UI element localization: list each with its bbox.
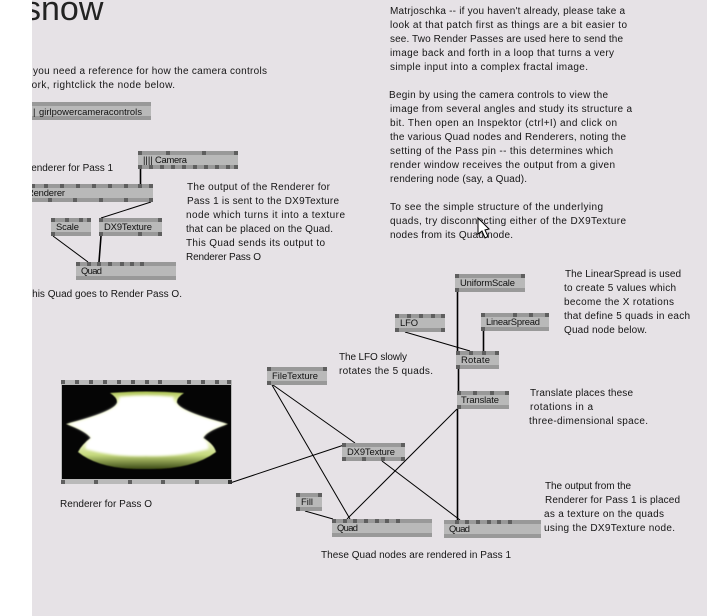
caption: quad goes to render pass 0: This Quad goes to Render Pass O.: [26, 289, 182, 300]
text block: lfo explanation: [339, 352, 433, 377]
text block: introduction: Begin by using the camera controls to view the: [389, 90, 608, 101]
wire: dx9texture to quad: [99, 236, 101, 262]
text block: camera controls note: work, rightclick the node below.: [23, 80, 175, 91]
node: scale: [51, 218, 91, 236]
node: fill: [296, 493, 322, 511]
text block: introduction: nodes from its Quad node.: [390, 230, 513, 241]
text block: introduction: To see the simple structure of the underlying: [390, 202, 603, 213]
node: quad right: [444, 520, 541, 538]
text block: output of renderer for pass 1: node which turns it into a texture: [186, 210, 345, 221]
render: fractal shape: [66, 392, 228, 469]
text block: output texture explanation: The output from the: [545, 481, 631, 492]
text block: output texture explanation: as a texture on the quads: [544, 509, 664, 520]
text block: linearspread explanation: [564, 269, 690, 336]
node: filetexture: FileTexture: [272, 370, 318, 381]
node: camera: [138, 151, 238, 169]
text block: output of renderer for pass 1: Renderer Pass O: [186, 252, 261, 263]
text block: translate explanation: rotations in a: [530, 402, 593, 413]
text block: introduction: render window receives the output from a given: [390, 160, 615, 171]
node: renderer: [20, 184, 153, 202]
text block: lfo explanation: rotates the 5 quads.: [339, 366, 433, 377]
node: lfo: [395, 314, 445, 332]
text block: output of renderer for pass 1: that can be placed on the Quad.: [186, 224, 333, 235]
text block: introduction: bit. Then open an Inspektor (ctrl+I) and click on: [390, 118, 617, 129]
node: renderer: Renderer: [27, 187, 65, 198]
text block: introduction: see. Two Render Passes are used here to send the: [390, 34, 623, 45]
text block: output of renderer for pass 1: Pass 1 is sent to the DX9Texture: [187, 196, 339, 207]
label: renderer for pass 1: Renderer for Pass 1: [24, 163, 113, 174]
wire: renderer to dx9texture: [101, 202, 151, 218]
text block: introduction: the various Quad nodes and Renderers, noting the: [390, 132, 626, 143]
text block: translate explanation: three-dimensional space.: [529, 416, 648, 427]
text block: linearspread explanation: become the X rotations: [564, 297, 674, 308]
text block: output texture explanation: [544, 481, 680, 534]
text block: linearspread explanation: Quad node below.: [564, 325, 647, 336]
text block: output of renderer for pass 1: The output of the Renderer for: [187, 182, 331, 193]
node: dx9texture: [99, 218, 162, 236]
wire: camera to renderer: [140, 169, 142, 184]
icon: mouse cursor: [478, 218, 489, 238]
node: linearspread: [481, 313, 549, 331]
node: camera: ||||: [143, 154, 153, 165]
node: linearspread: LinearSpread: [486, 316, 540, 327]
text block: lfo explanation: The LFO slowly: [339, 352, 407, 363]
node: rotate: Rotate: [461, 354, 490, 365]
text block: translate explanation: [529, 388, 648, 427]
wires: rotate and translate chain: [405, 292, 484, 520]
node: quad: Quad: [81, 265, 102, 276]
node: translate: [457, 391, 509, 409]
node: quad left: Quad: [337, 522, 358, 533]
node: quad right: Quad: [449, 523, 470, 534]
text block: introduction: quads, try disconnecting either of the DX9Texture: [390, 216, 626, 227]
renderer window: pass 0: [61, 380, 232, 484]
node: quad: [76, 262, 176, 280]
wire: scale to quad: [53, 236, 88, 262]
node: fill: Fill: [301, 496, 313, 507]
caption: renderer for pass 0: Renderer for Pass O: [60, 499, 152, 510]
text block: introduction: look at that patch first as things are a bit easier to: [390, 20, 627, 31]
text block: introduction: simple input into a complex fractal image.: [390, 62, 588, 73]
text block: linearspread explanation: to create 5 values which: [564, 283, 676, 294]
node: uniformscale: UniformScale: [460, 277, 515, 288]
node: filetexture: [267, 367, 327, 385]
text block: linearspread explanation: The LinearSpread is used: [565, 269, 681, 280]
text block: introduction: image from several angles and study its structure a: [390, 104, 632, 115]
node: girlpowercameracontrols: |: [33, 106, 35, 117]
text block: introduction: setting of the Pass pin -- this determines which: [390, 146, 613, 157]
node: girlpowercameracontrols: [20, 102, 151, 120]
text block: introduction: image back and forth in a loop that turns a very: [390, 48, 614, 59]
node: dx9texture: DX9Texture: [104, 221, 152, 232]
node: uniformscale: [455, 274, 525, 292]
text block: output of renderer for pass 1: This Quad sends its output to: [186, 238, 325, 249]
node: lfo: LFO: [400, 317, 418, 328]
node: scale: Scale: [56, 221, 79, 232]
text block: camera controls note: you need a reference for how the camera controls: [33, 66, 267, 77]
text block: translate explanation: Translate places these: [530, 388, 633, 399]
node: quad left: [332, 519, 432, 537]
wires: lower patch connections: [230, 385, 460, 520]
text block: introduction: Matrjoschka -- if you haven't already, please take a: [390, 6, 625, 17]
node: dx9texture lower: [342, 443, 405, 461]
node: camera: Camera: [155, 154, 188, 165]
node: dx9texture lower: DX9Texture: [347, 446, 395, 457]
text block: output texture explanation: Renderer for Pass 1 is placed: [545, 495, 680, 506]
text block: output of renderer for pass 1: [186, 182, 345, 263]
text block: introduction: rendering node (say, a Quad).: [390, 174, 527, 185]
node: translate: Translate: [461, 394, 499, 405]
text block: introduction: [389, 6, 632, 241]
text block: output texture explanation: using the DX9Texture node.: [544, 523, 675, 534]
node: rotate: [456, 351, 499, 369]
caption: quad nodes rendered in pass 1: These Quad nodes are rendered in Pass 1: [321, 550, 511, 561]
text block: linearspread explanation: that define 5 quads in each: [564, 311, 690, 322]
text block: camera controls note: [23, 66, 267, 91]
node: girlpowercameracontrols: girlpowercameracontrols: [39, 106, 142, 117]
